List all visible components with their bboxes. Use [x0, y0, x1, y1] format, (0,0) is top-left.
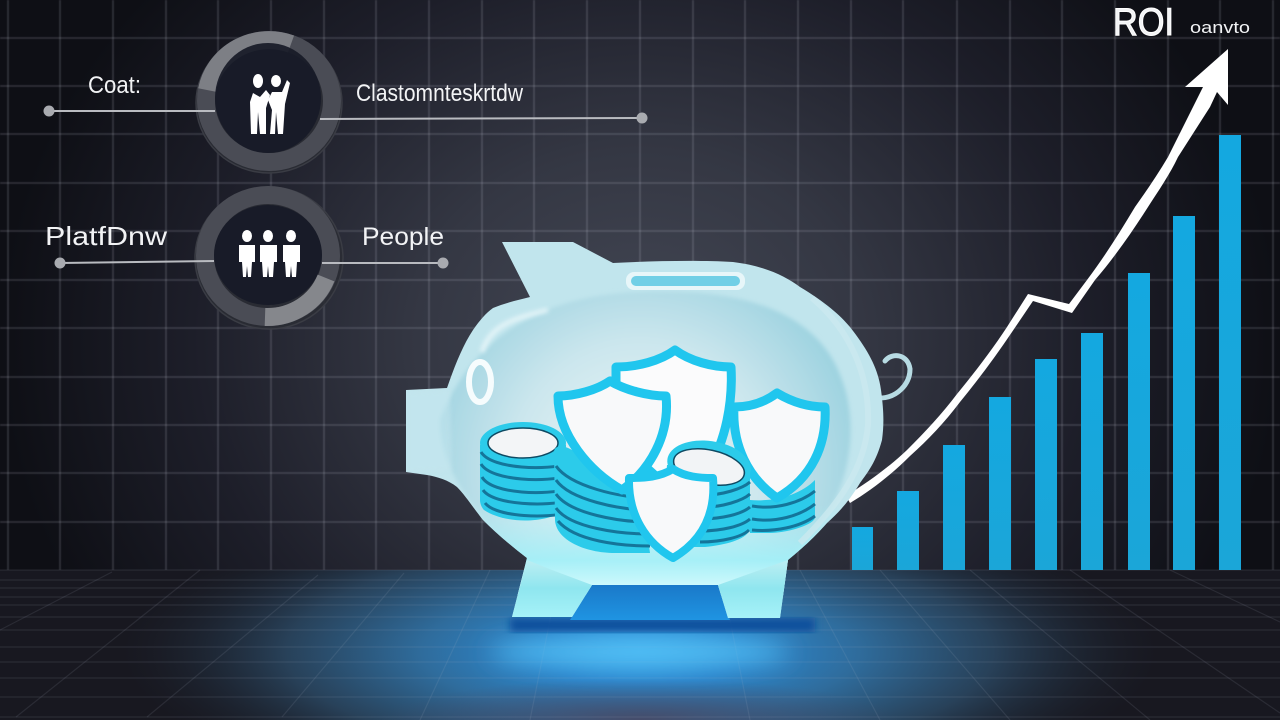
- pig body: [406, 242, 883, 618]
- connector: Platform: [54, 258, 214, 268]
- ring: cost: [196, 33, 342, 173]
- pig tail: [880, 356, 910, 398]
- label: Coat: Coat:: [88, 72, 141, 99]
- arrow: rising ROI: [846, 49, 1228, 503]
- connector: People: [322, 258, 448, 268]
- icon: three people: [239, 230, 300, 277]
- icon: two people: [250, 74, 290, 134]
- coin stack: right: [750, 480, 815, 533]
- floor: [0, 570, 1280, 720]
- coin slot: [626, 272, 745, 290]
- label: Customer: Clastomnteskrtdw: [356, 80, 524, 107]
- shield: right: [734, 393, 825, 498]
- connector: Coat: [44, 106, 215, 116]
- coin stack: left: [480, 422, 566, 520]
- pig eye: [469, 362, 491, 402]
- shield: back: [616, 350, 731, 480]
- label: ROI: ROI: [1113, 1, 1174, 44]
- label: ROI caption: oanvto: [1190, 18, 1250, 37]
- connector: Customer: [320, 112, 648, 124]
- pig rim: [800, 298, 868, 543]
- label: People: People: [362, 223, 444, 251]
- label: Platform: PlatfDnw: [45, 221, 167, 251]
- shield: left: [558, 381, 667, 490]
- shield: front: [629, 469, 713, 558]
- piggy bank: [400, 242, 910, 618]
- bar chart: [852, 135, 1241, 570]
- pig highlight: [482, 310, 548, 352]
- coin stack: front: [660, 435, 754, 547]
- floor light under piggy bank: [490, 584, 815, 664]
- coin stack: middle: [554, 446, 650, 553]
- ring: people: [195, 187, 343, 329]
- pig feet: [512, 560, 788, 618]
- top ring with cost labels: [44, 33, 648, 173]
- bottom ring with platform and people labels: [45, 187, 448, 329]
- pig inner glass: [442, 292, 852, 595]
